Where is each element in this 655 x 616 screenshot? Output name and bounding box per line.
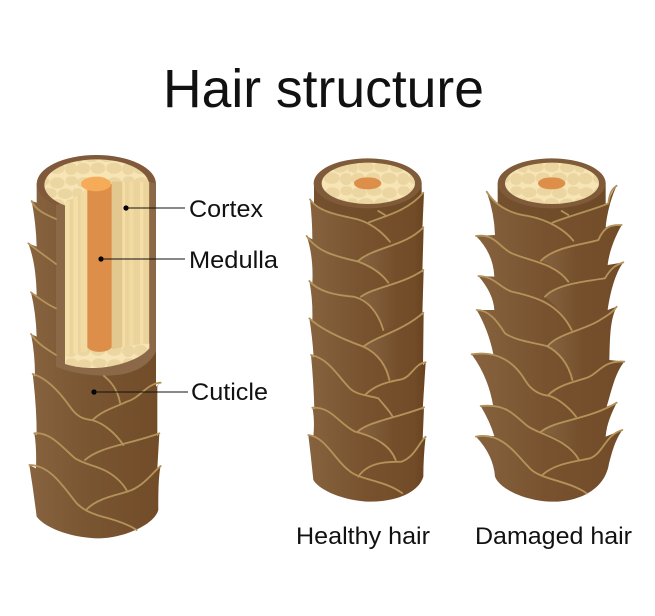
label: Cuticle	[91, 379, 268, 406]
illustration: cut-away hair strand	[28, 155, 161, 538]
top cylinder	[498, 158, 606, 237]
scale highlights	[541, 242, 598, 460]
cuticle lines	[28, 201, 161, 530]
label: Cortex: Cortex	[189, 196, 263, 223]
illustration: healthy hair	[307, 158, 426, 502]
cuticle lines	[472, 186, 624, 493]
floor cells	[65, 343, 149, 368]
title: Hair structure	[163, 59, 484, 119]
top cylinder	[314, 158, 422, 237]
caption: Damaged hair: Damaged hair	[475, 523, 632, 550]
illustration: damaged hair	[472, 158, 624, 502]
cuticle lines	[307, 193, 426, 493]
label: Medulla: Medulla	[189, 247, 279, 274]
cortex	[65, 177, 149, 367]
strand body	[307, 193, 426, 502]
top cross-section cells	[44, 159, 149, 211]
strand body	[472, 186, 624, 502]
rim	[37, 155, 156, 213]
strand body	[28, 183, 161, 538]
medulla	[81, 177, 112, 352]
label: Medulla	[98, 247, 279, 274]
scale highlights	[358, 240, 415, 460]
cut wall and lip	[56, 177, 156, 376]
label: Cuticle: Cuticle	[191, 379, 268, 406]
caption: Healthy hair: Healthy hair	[296, 523, 430, 550]
label: Cortex	[123, 196, 263, 223]
